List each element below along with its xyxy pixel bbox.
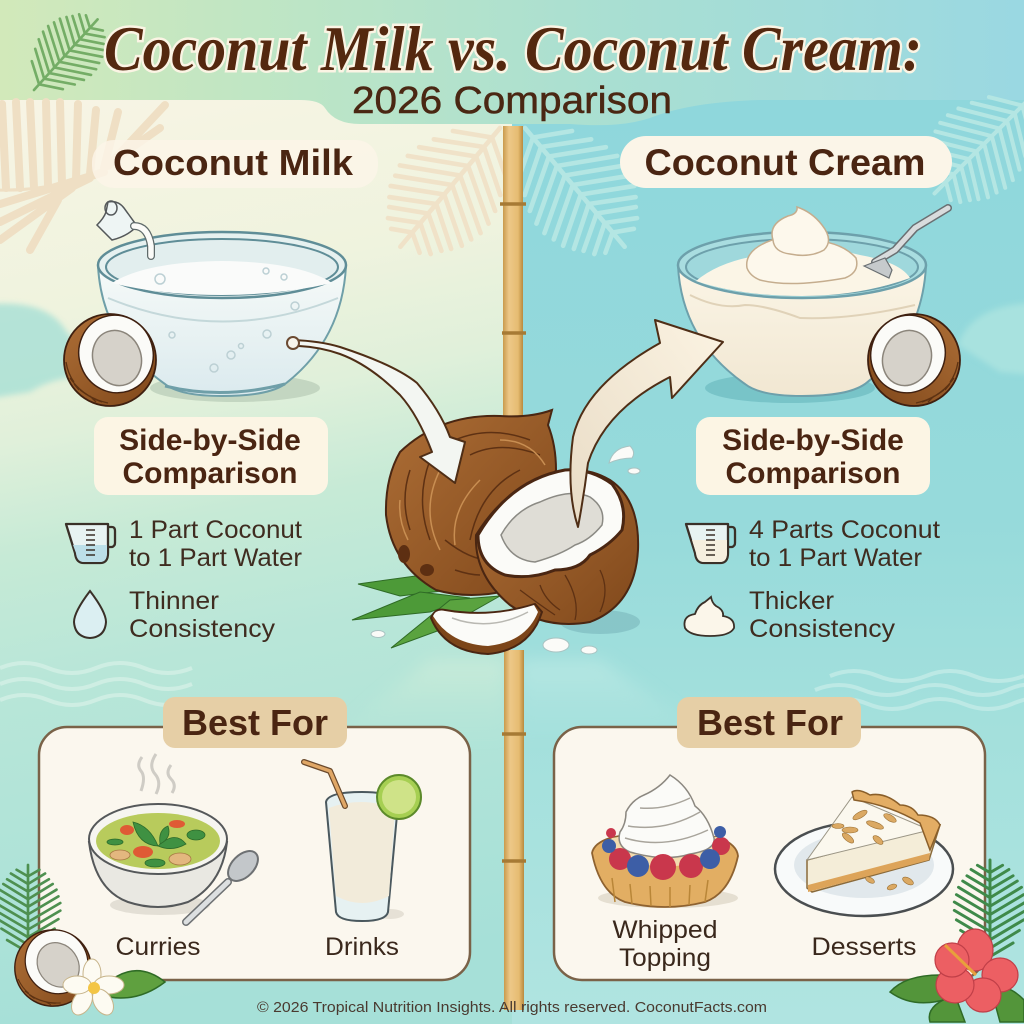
bamboo divider [500,126,526,1010]
wave lines: right [815,671,1024,709]
card: side-by-side left: Comparison [122,457,298,490]
card: side-by-side left: Side-by-Side [119,424,301,457]
text: ratio right, line 1: 4 Parts Coconut [749,516,940,544]
coconut piece [431,604,542,654]
icon: spoon [186,845,264,922]
card: side-by-side left [94,417,328,495]
background: light glow under coconut, left [330,660,505,740]
icon: whipped cream dollop [684,597,734,636]
green leaves [352,574,500,648]
palm frond: right near bamboo [485,94,665,281]
heading pill: Coconut Milk [92,140,378,188]
text: consistency right, line 1: Thicker [749,587,834,615]
palm frond: left near bamboo [360,94,540,281]
palm frond: top right [902,66,1024,226]
label: best for right: Best For [697,702,843,743]
arrow start marker [287,337,299,349]
label: best for right [677,697,861,748]
subtitle: 2026 Comparison [352,80,672,122]
decoration: bottom-right palm and hibiscus [890,860,1024,1022]
icon: curry bowl [89,754,227,915]
title: Coconut Milk vs. Coconut Cream: [104,14,922,84]
label: Whipped Topping, line 2: Topping [619,944,711,972]
illustration: bowl of coconut milk [97,201,346,402]
center coconut illustration [352,410,640,654]
text: consistency left, line 2: Consistency [129,615,276,643]
half coconut open [476,470,638,624]
label: Curries: Curries [116,933,200,961]
heading pill: Coconut Cream: Coconut Cream [644,142,926,183]
background swoosh: right pale cloud [958,303,1024,375]
illustration: bowl of coconut cream [678,207,948,403]
card: side-by-side right: Comparison [725,457,901,490]
card: side-by-side right: Side-by-Side [722,424,904,457]
card: side-by-side right [696,417,930,495]
icon: glass drink with lime [304,762,421,921]
text: ratio left, line 1: 1 Part Coconut [129,516,302,544]
icon: water drop [74,591,106,638]
panel: best for, coconut milk [39,697,470,980]
label: best for left: Best For [182,702,328,743]
whole coconut [386,410,556,595]
arrow: bowl of milk to coconut [293,340,465,483]
plumeria flower [63,959,124,1019]
background: light glow under coconut, right [520,660,715,740]
background: coconut milk side [0,0,512,1024]
icon: half coconut, right [860,305,960,406]
background swoosh: left aqua blob [0,304,120,400]
arrow: coconut to bowl of cream [570,320,723,527]
heading pill: Coconut Cream [620,136,952,188]
footer: © 2026 Tropical Nutrition Insights. All rights reserved. CoconutFacts.com [257,1000,767,1016]
icon: measuring cup right [686,524,735,563]
icon: pitcher pouring milk [97,201,151,256]
icon: whipped cream tart [592,775,738,908]
icon: measuring cup left [66,524,115,563]
text: consistency right, line 2: Consistency [749,615,896,643]
background: coconut cream side [512,0,1024,1024]
whipped cream swirl [747,207,857,284]
decoration: bottom-left coconut, palm and plumeria [0,865,165,1019]
milk droplets [371,446,640,654]
top-left green palm leaf [10,0,122,112]
label: Desserts: Desserts [812,933,916,961]
icon: coconut cream pie slice [775,791,953,916]
heading pill: Coconut Milk: Coconut Milk [113,142,354,183]
label: Whipped Topping, line 1: Whipped [612,916,718,944]
panel: best for, coconut cream [554,697,985,980]
text: ratio left, line 2: to 1 Part Water [129,544,302,572]
spoon [864,208,948,278]
palm frond: left large pale [0,102,165,250]
icon: half coconut, left [64,305,164,406]
header band [0,0,1024,125]
label: best for left [163,697,347,748]
text: ratio right, line 2: to 1 Part Water [749,544,922,572]
label: Drinks: Drinks [325,933,399,961]
text: consistency left, line 1: Thinner [129,587,219,615]
wave lines: left [0,663,192,705]
